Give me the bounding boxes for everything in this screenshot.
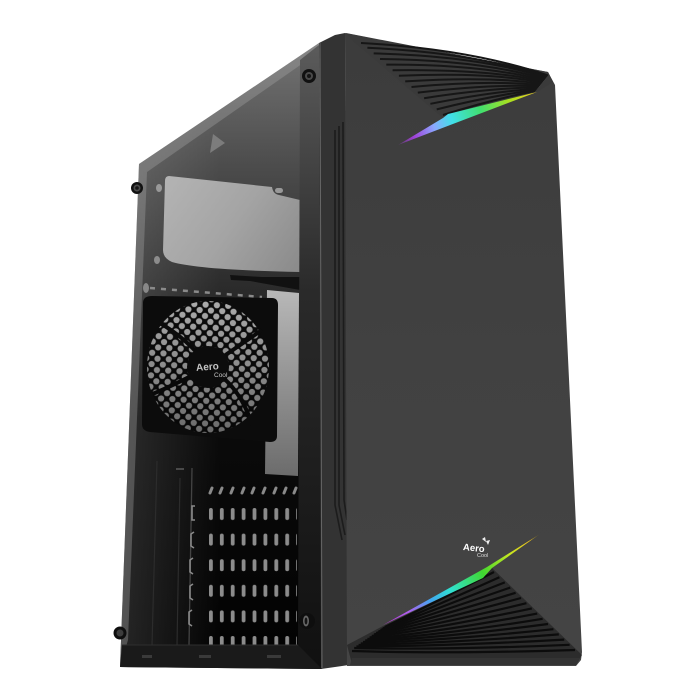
fan logo: Aero	[196, 361, 219, 374]
side vents	[335, 122, 347, 540]
fan spokes	[150, 322, 262, 425]
drive bay opening	[265, 290, 299, 476]
fan grille	[147, 301, 269, 433]
cable	[230, 275, 300, 290]
fan logo: Cool	[214, 372, 228, 379]
triangle cut-out	[210, 134, 225, 153]
screw: bottom right	[299, 613, 315, 629]
top ribbed wedge	[346, 33, 553, 118]
tray dashes	[150, 288, 262, 297]
screw: bottom left	[114, 626, 126, 640]
window pillar	[298, 45, 321, 668]
motherboard tray vents	[209, 488, 297, 649]
panel: glass side of case	[120, 43, 322, 669]
front logo	[462, 537, 490, 559]
front logo: Cool	[477, 553, 488, 559]
panel: front face	[345, 33, 582, 666]
glass frame highlight	[120, 43, 319, 667]
bottom RGB light strip	[383, 534, 540, 625]
power supply plate	[143, 176, 300, 293]
bottom rail	[120, 645, 322, 669]
screw: top right	[302, 69, 316, 83]
fan logo	[196, 361, 228, 379]
cooling fan	[142, 296, 278, 442]
bottom ribbed wedge	[347, 568, 582, 665]
top RGB light strip	[398, 92, 537, 145]
front logo: Aero	[462, 542, 485, 555]
screw: top left	[131, 182, 143, 194]
fan hub	[187, 346, 229, 388]
panel: front chamfer	[319, 33, 349, 669]
expansion bracket lines	[152, 461, 195, 645]
